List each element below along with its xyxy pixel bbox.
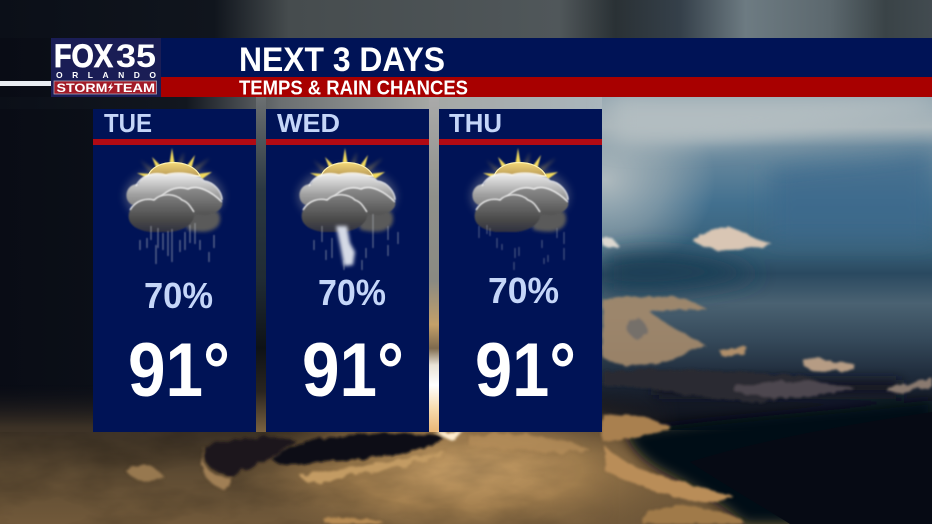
streak: white line left of logo (0, 81, 51, 86)
lightning bolt (336, 226, 355, 266)
day label: TUE: TUE (104, 108, 152, 138)
heading: next 3 days: NEXT 3 DAYS (239, 41, 445, 79)
temperature: 91° (128, 328, 230, 413)
panel: Thursday (439, 108, 602, 432)
temperature: 91° (302, 328, 404, 413)
rain chance: 70% (488, 270, 559, 311)
rain chance: 70% (318, 272, 386, 313)
soft mottling of the cloud deck (0, 432, 620, 524)
logo: FOX 35 Orlando Storm Team: TEAM (114, 81, 155, 95)
subheading: temps and rain chances: TEMPS & RAIN CHANCES (239, 78, 468, 100)
icon: sun, cloud and rain (124, 148, 224, 264)
day label: THU: THU (449, 108, 502, 138)
rain chance: 70% (144, 275, 213, 316)
temperature: 91° (475, 328, 576, 413)
logo: FOX 35 Orlando Storm Team: ORLANDO (56, 70, 156, 80)
logo: FOX 35 Orlando Storm Team: 35 (116, 38, 156, 74)
day label: WED: WED (277, 108, 340, 138)
icon: sun, cloud and rain (470, 148, 570, 270)
panel: Tuesday (93, 108, 256, 432)
logo: FOX 35 Orlando Storm Team: FOX (54, 38, 114, 74)
cloud details (125, 226, 932, 524)
panel: Wednesday (266, 108, 429, 432)
icon: sun, cloud, lightning and rain (297, 148, 398, 270)
logo: FOX 35 Orlando Storm Team (51, 38, 161, 97)
logo: FOX 35 Orlando Storm Team: STORM (56, 81, 108, 95)
header bar (161, 38, 932, 100)
